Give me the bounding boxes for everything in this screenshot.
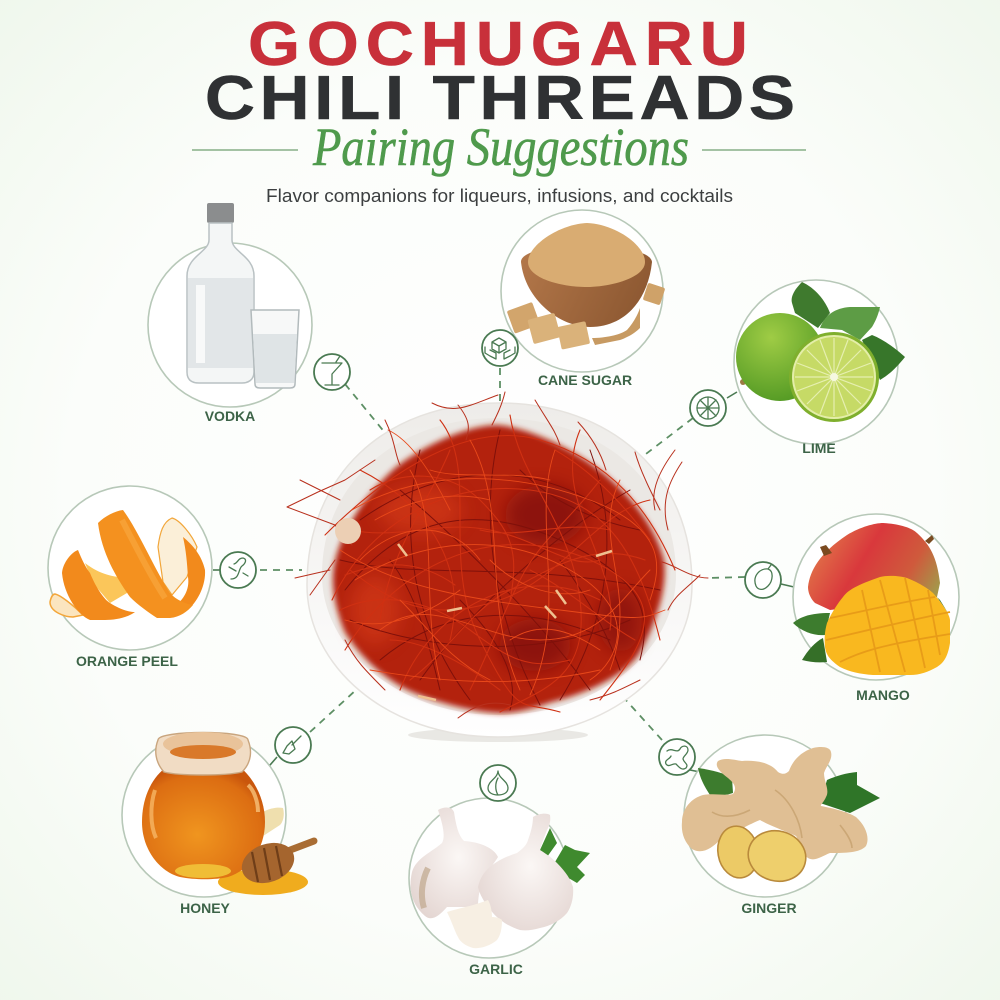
- bowl of chili threads: [287, 392, 708, 742]
- label: mango: MANGO: [856, 687, 910, 703]
- label: cane sugar: CANE SUGAR: [538, 372, 632, 388]
- label: vodka: VODKA: [205, 408, 255, 424]
- panel: ginger: [682, 735, 880, 916]
- icon: cocktail badge: [314, 354, 350, 390]
- icon: vodka bottle and glass: [187, 203, 299, 388]
- tagline: Flavor companions for liqueurs, infusions, and cocktails: [266, 186, 733, 206]
- icon: honey dipper badge: [275, 727, 311, 763]
- label: honey: HONEY: [180, 900, 231, 916]
- icon: sugar cubes badge: [482, 330, 518, 366]
- title: CHILI THREADS: [205, 62, 795, 132]
- icon: mango with cubes: [793, 523, 950, 675]
- label: lime: LIME: [802, 440, 836, 456]
- panel: honey: [122, 732, 314, 916]
- panel: lime: [734, 280, 905, 456]
- panel: cane sugar: [501, 210, 665, 388]
- icon: garlic badge: [480, 765, 516, 801]
- panel: mango: [793, 514, 959, 703]
- icon: garlic bulbs and parsley: [411, 808, 590, 948]
- icon: mango badge: [745, 562, 781, 598]
- icon: lime slice badge: [690, 390, 726, 426]
- label: ginger: GINGER: [741, 900, 797, 916]
- label: garlic: GARLIC: [469, 961, 523, 977]
- icon: orange peel badge: [220, 552, 256, 588]
- title: [205, 9, 795, 132]
- icon: honey jar and dipper: [142, 732, 314, 895]
- chili thread mass: [287, 392, 708, 718]
- panel: orange peel: [48, 486, 212, 669]
- panel: vodka: [148, 203, 312, 424]
- bowl: [307, 403, 692, 742]
- icon: orange peel spiral: [50, 510, 205, 620]
- label: orange peel: ORANGE PEEL: [76, 653, 178, 669]
- icon: ginger root: [682, 747, 880, 888]
- icon: ginger badge: [659, 739, 695, 775]
- subtitle script: Pairing Suggestions: Pairing Suggestions: [312, 117, 689, 177]
- dashed connectors: [213, 368, 794, 780]
- icon: limes with leaves: [736, 282, 905, 422]
- icon: sugar bowl and cubes: [507, 223, 665, 350]
- title: GOCHUGARU: [248, 9, 748, 78]
- panel: garlic: [409, 798, 590, 977]
